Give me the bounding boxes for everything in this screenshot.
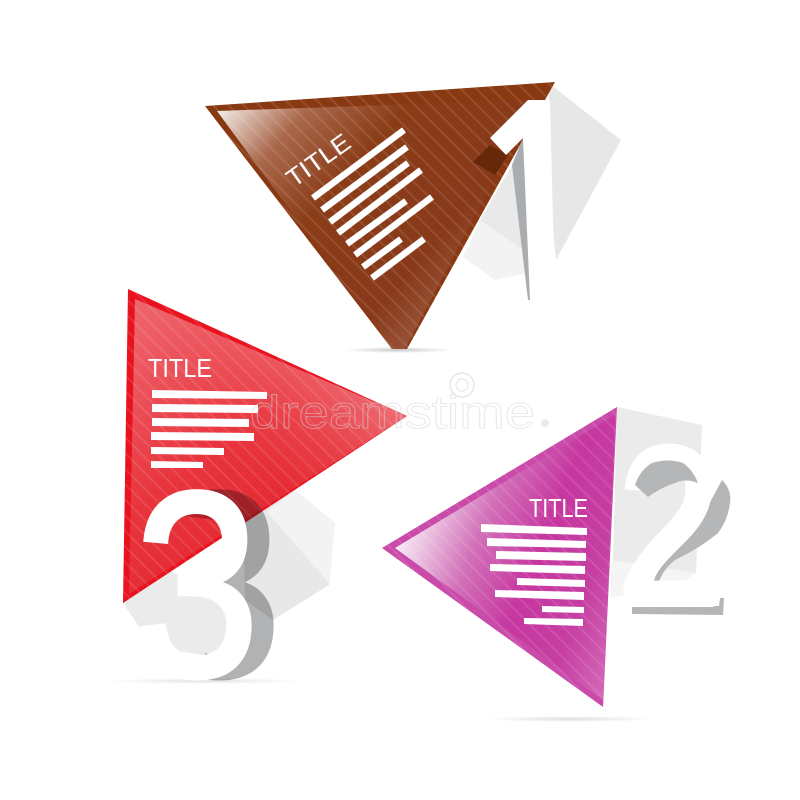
ground shadow: triangle 1 — [343, 347, 453, 353]
fold shadow on triangle — [473, 145, 508, 175]
panel: step 2 purple triangle — [382, 395, 730, 707]
ground shadow: triangle 2 — [485, 716, 655, 722]
title: TITLE — [281, 128, 356, 193]
folded shadows behind numeral 3 — [123, 490, 335, 660]
title: TITLE — [529, 493, 588, 523]
numeral 2 extrusion — [632, 480, 730, 615]
numeral 3 shadow: 3 — [157, 438, 281, 731]
watermark — [250, 373, 549, 438]
numeral 1 — [490, 100, 554, 232]
numeral 3: 3 — [135, 438, 259, 731]
title: TITLE — [148, 353, 212, 383]
folded shadows behind numeral 1 — [463, 84, 621, 280]
fold shadow on triangle — [155, 510, 215, 527]
panel: step 3 red triangle — [123, 289, 407, 680]
ground shadow: triangle 3 — [105, 678, 305, 684]
numeral 1: 1 — [454, 43, 621, 361]
panel: step 1 brown triangle — [205, 82, 621, 349]
text lines — [313, 130, 432, 278]
triangle body — [123, 289, 407, 603]
triangle body — [205, 82, 555, 349]
numeral 2 inner shadow — [635, 460, 698, 497]
folded shadow behind numeral 2 — [610, 407, 702, 597]
text lines — [151, 390, 267, 468]
watermark: dreamstime — [250, 386, 535, 438]
numeral 2: 2 — [617, 395, 721, 657]
triangle body — [382, 407, 617, 707]
numeral 1 sliver — [512, 138, 530, 300]
text lines — [481, 524, 587, 626]
